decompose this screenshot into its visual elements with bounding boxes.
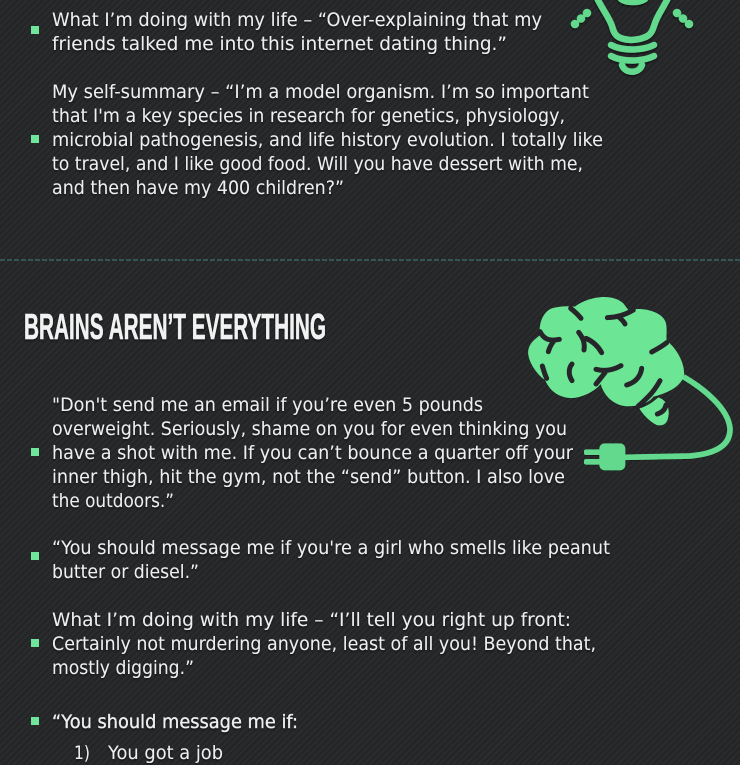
cord [623, 377, 730, 457]
divider line [0, 259, 740, 261]
text: my self-summary: My self-summary – “I’m a model organism. I’m so important [52, 81, 589, 103]
bullet 2 [31, 135, 39, 143]
text: my self-summary: microbial pathogenesis, and life history evolution. I totally like [52, 129, 603, 151]
text: my self-summary: to travel, and I like good food. Will you have dessert with me, [52, 153, 583, 175]
text: mostly digging: mostly digging.” [52, 657, 194, 679]
text: don't send me an email [52, 394, 573, 512]
text: don't send me an email: inner thigh, hit the gym, not the “send” button. I also love [52, 466, 565, 488]
text: mostly digging [52, 609, 596, 679]
text: don't send me an email: the outdoors.” [52, 490, 174, 512]
text: don't send me an email: overweight. Seriously, shame on you for even thinking you [52, 418, 567, 440]
text: what I'm doing with my life: friends talked me into this internet dating thing.” [52, 33, 507, 55]
text: mostly digging: What I’m doing with my life – “I’ll tell you right up front: [52, 609, 571, 631]
text: don't send me an email: have a shot with me. If you can’t bounce a quarter off your [52, 442, 573, 464]
text: what I'm doing with my life [52, 9, 542, 55]
bullet 5 [31, 639, 39, 647]
text: peanut butter or diesel [52, 537, 610, 583]
list item: you got a job: You got a job [107, 742, 223, 764]
bullet 3 [31, 448, 39, 456]
bullet 4 [31, 552, 39, 560]
icon: brain with plug [528, 297, 730, 470]
text: peanut butter or diesel: butter or diesel.” [52, 561, 199, 583]
list item: you got a job: 1) [74, 742, 90, 764]
heading: BRAINS AREN’T EVERYTHING [24, 306, 326, 347]
text: mostly digging: Certainly not murdering anyone, least of all you! Beyond that, [52, 633, 596, 655]
text: my self-summary: and then have my 400 children?” [52, 177, 344, 199]
bullet 1 [31, 26, 39, 34]
brain folds [540, 308, 667, 414]
text: you should message me if: “You should message me if: [52, 711, 298, 733]
text: peanut butter or diesel: “You should message me if you're a girl who smells like peanut [52, 537, 610, 559]
icon: light bulb [571, 0, 693, 72]
brain body [528, 297, 684, 406]
plug [584, 443, 625, 470]
bullet 6 [31, 717, 39, 725]
brain stem [639, 397, 669, 425]
text: my self-summary: that I'm a key species in research for genetics, physiology, [52, 105, 565, 127]
text: don't send me an email: "Don't send me an email if you’re even 5 pounds [52, 394, 483, 416]
text: what I'm doing with my life: What I’m doing with my life – “Over-explaining that my [52, 9, 542, 31]
text: my self-summary [52, 81, 603, 199]
